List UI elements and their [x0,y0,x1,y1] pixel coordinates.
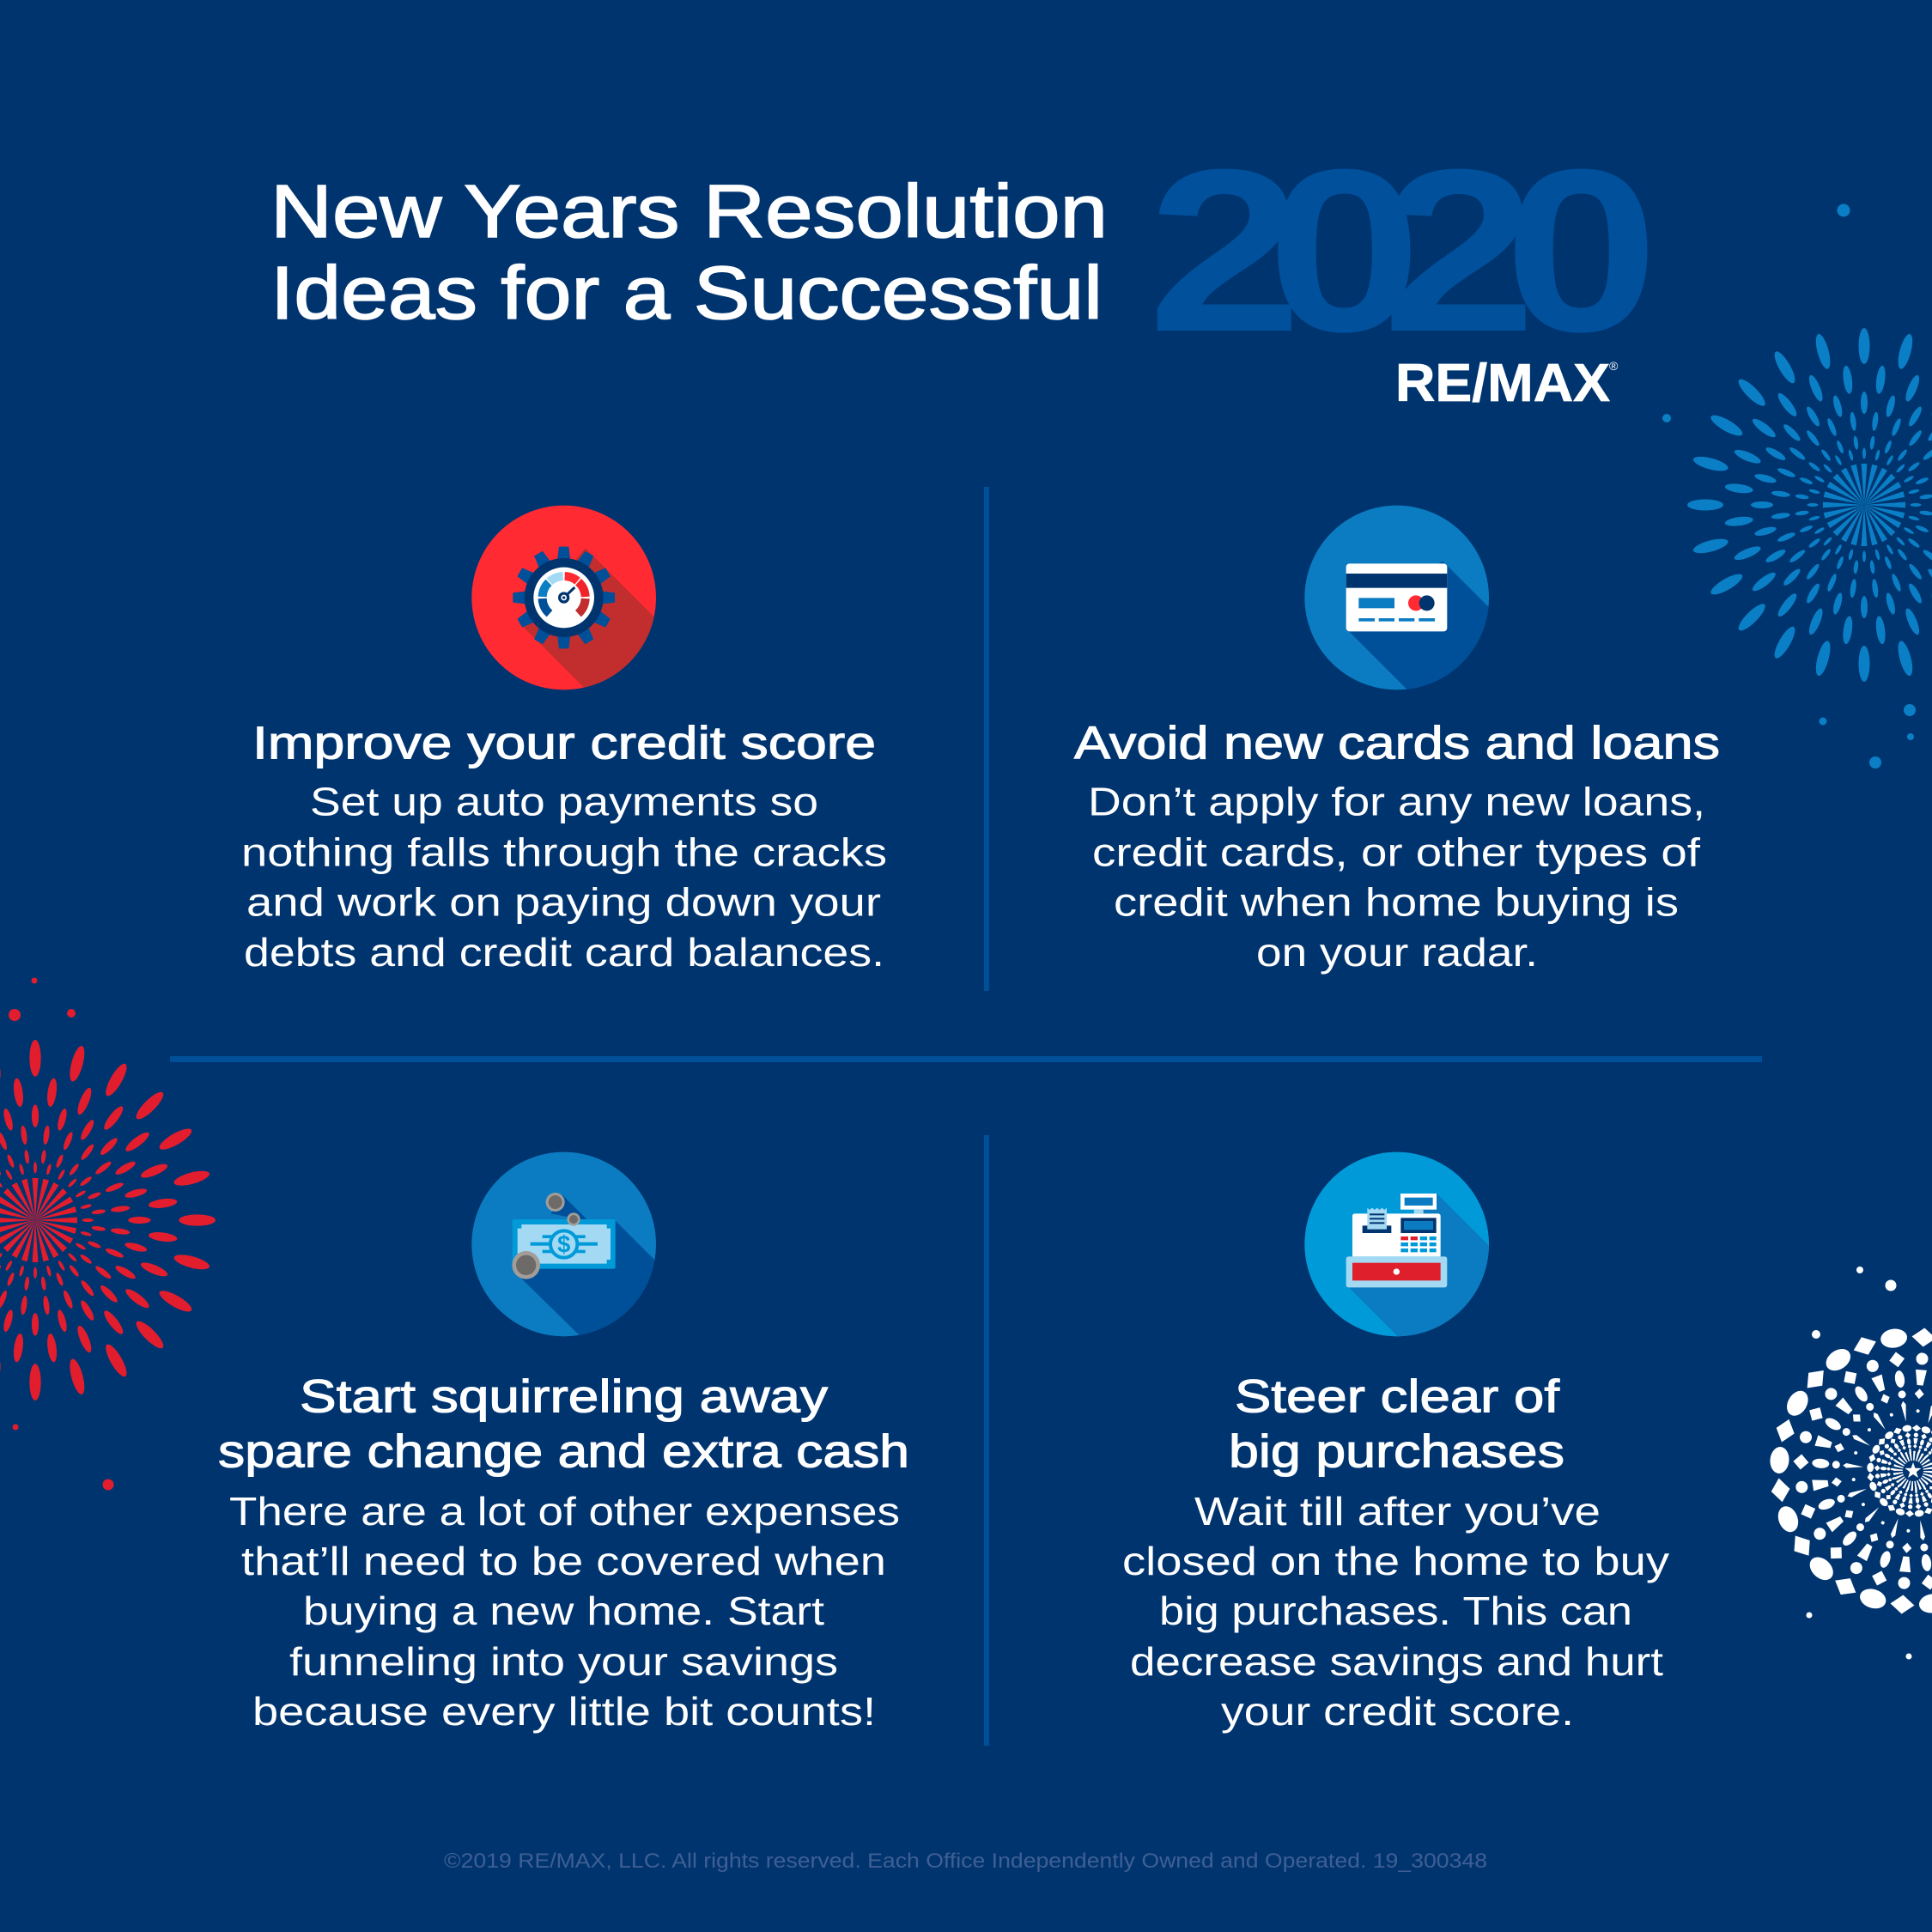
body text [241,780,887,975]
icon: cash register [1304,1152,1489,1336]
title: New Years Resolution [270,170,1108,253]
body text: closed on the home to buy [1122,1539,1669,1583]
heading: Avoid new cards and loans [1074,718,1720,769]
body text [1088,780,1705,975]
body text: credit cards, or other types of [1092,829,1700,874]
heading: Start squirreling away [300,1370,828,1422]
body text: buying a new home. Start [303,1589,824,1633]
body text: There are a lot of other expenses [229,1489,900,1534]
RE/MAX logo: ® [1609,359,1619,373]
body text [1122,1489,1669,1734]
title [270,170,1108,335]
body text: decrease savings and hurt [1130,1639,1663,1684]
body text: that’ll need to be covered when [241,1539,886,1583]
body text: funneling into your savings [289,1639,838,1684]
panel: improve your credit score [241,506,887,975]
year 2020: 2020 [1148,121,1659,380]
heading: Improve your credit score [252,718,876,769]
body text: on your radar. [1256,930,1538,975]
body text: big purchases. This can [1159,1589,1632,1633]
body text: nothing falls through the cracks [241,829,887,874]
body text: because every little bit counts! [252,1689,876,1734]
RE/MAX logo: RE/MAX [1395,354,1610,413]
heading: spare change and extra cash [218,1425,909,1477]
heading: big purchases [1229,1425,1564,1477]
footer copyright: ©2019 RE/MAX, LLC. All rights reserved. Each Office Independently Owned and Operated. 19_300348 [444,1850,1487,1873]
firework: white, lower right [1759,1267,1932,1659]
dividers [170,487,1762,1746]
firework: blue, top right [1662,204,1932,769]
heading [218,1370,909,1477]
icon: dollar bill and coins [471,1152,656,1336]
icon: credit card [1304,505,1489,690]
body text: Wait till after you’ve [1194,1489,1601,1534]
panel: steer clear of big purchases [1122,1152,1669,1734]
body text [229,1489,900,1734]
panel: start squirreling away [218,1152,909,1734]
body text: Set up auto payments so [310,780,818,824]
firework: red, left [0,977,216,1491]
panel: avoid new cards and loans [1074,506,1720,975]
body text: Don’t apply for any new loans, [1088,780,1705,824]
body text: debts and credit card balances. [244,930,884,975]
heading: Steer clear of [1235,1370,1560,1422]
heading [1229,1370,1564,1477]
body text: credit when home buying is [1114,879,1679,924]
body text: your credit score. [1221,1689,1574,1734]
body text: and work on paying down your [246,879,881,924]
icon: gauge in gear [471,505,656,690]
title: Ideas for a Successful [270,252,1103,335]
icon: dollar bill and coins: $ [557,1231,570,1258]
